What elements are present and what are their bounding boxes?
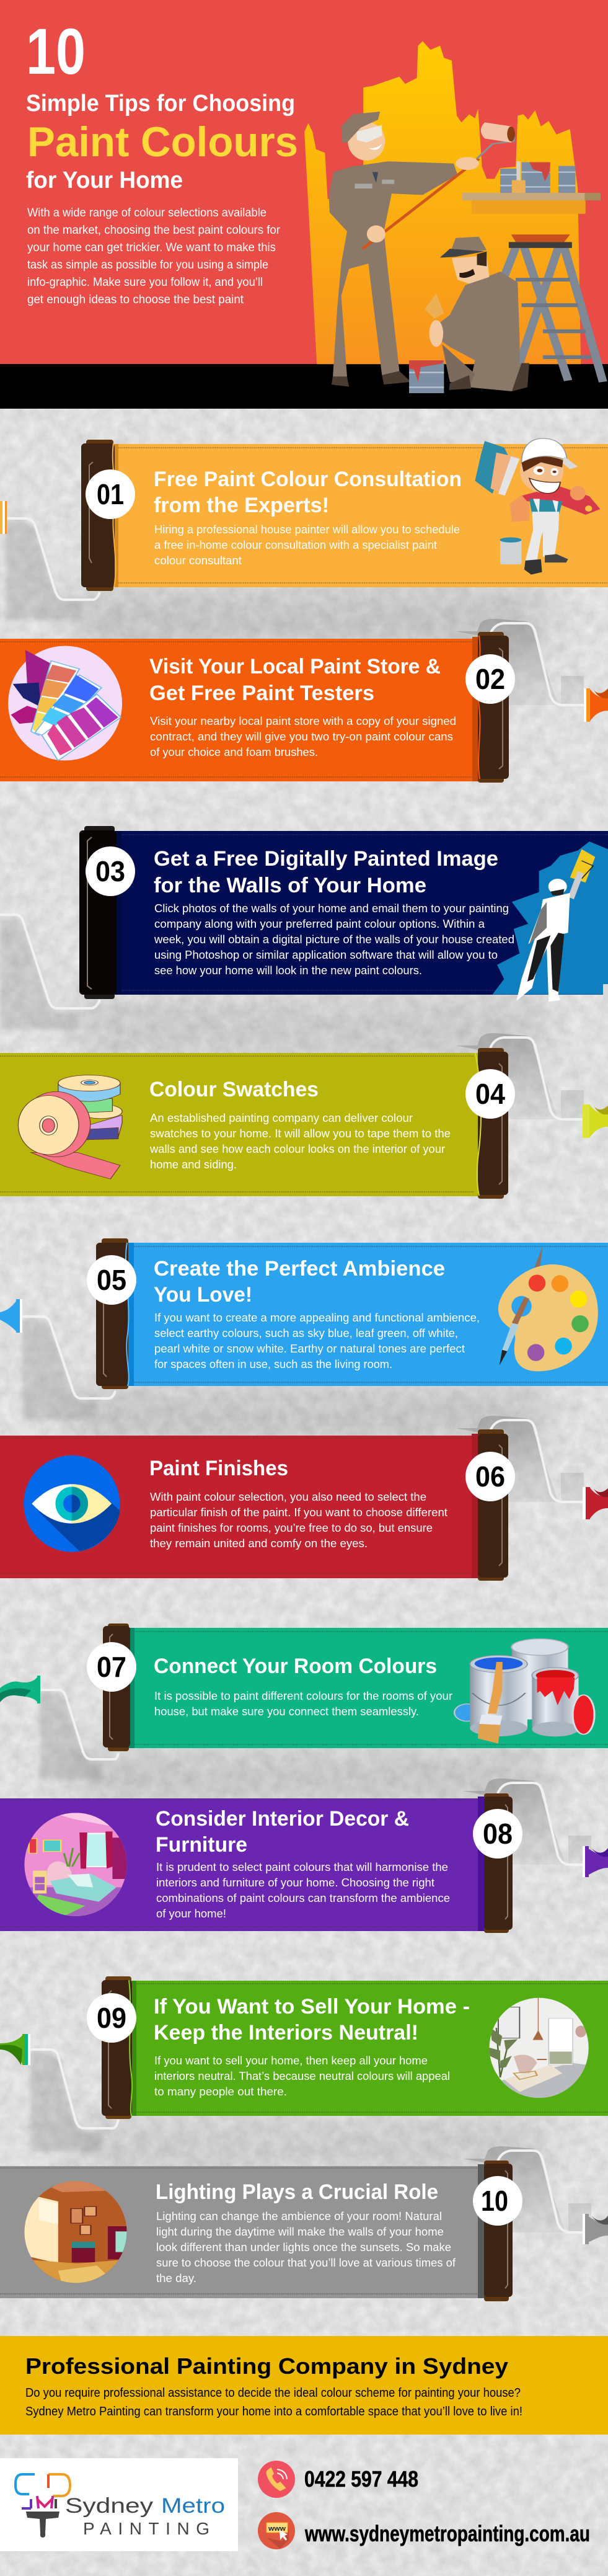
roller wire and handle xyxy=(456,1033,608,1138)
number badge: 06 xyxy=(475,1460,505,1493)
hero title: 10 xyxy=(26,16,86,88)
hero intro text xyxy=(27,207,281,306)
hero illustration: painters and painted wall xyxy=(304,41,603,393)
body text: With paint colour selection, you also need to select the xyxy=(150,1491,426,1503)
heading: You Love! xyxy=(154,1283,252,1307)
hero intro text: task as simple as possible for you using a simple xyxy=(27,259,268,272)
body text: interiors neutral. That’s because neutral colours will appeal xyxy=(154,2070,450,2082)
number badge: 10 xyxy=(481,2185,508,2217)
panel 09: sell your home xyxy=(0,1976,608,2152)
icon: cartoon painter xyxy=(475,438,600,575)
number badge xyxy=(473,2176,522,2226)
heading: Colour Swatches xyxy=(149,1078,319,1101)
logo: Sydney Metro Painting: PAINTING xyxy=(83,2519,209,2538)
number badge xyxy=(473,1809,522,1859)
hero intro text: your home can get trickier. We want to make this xyxy=(27,241,276,254)
panel 01: free consultation xyxy=(0,438,608,620)
heading: If You Want to Sell Your Home - xyxy=(154,1995,470,2019)
heading: Get Free Paint Testers xyxy=(149,682,374,705)
number badge: 04 xyxy=(475,1078,505,1110)
body text: Lighting can change the ambience of your room! Natural xyxy=(156,2210,442,2223)
number badge: 08 xyxy=(483,1818,513,1850)
body text: house, but make sure you connect them seamlessly. xyxy=(154,1705,419,1718)
body text: colour consultant xyxy=(154,554,242,567)
body text xyxy=(154,523,460,567)
roller wire and handle xyxy=(0,2034,118,2152)
body text: It is prudent to select paint colours that will harmonise the xyxy=(156,1861,448,1873)
roller wire xyxy=(0,915,100,1029)
body text: paint finishes for rooms, you’re free to do so, but ensure xyxy=(150,1522,433,1534)
heading xyxy=(154,468,462,517)
icon: rolls of tape xyxy=(18,1075,122,1179)
body text: select earthy colours, such as sky blue, leaf green, off white, xyxy=(154,1327,458,1339)
body text: contract, and they will give you two try-on paint colour cans xyxy=(150,731,453,743)
number badge xyxy=(465,654,515,704)
number badge xyxy=(465,1452,515,1501)
body text: home and siding. xyxy=(150,1158,237,1171)
body text xyxy=(150,1491,447,1550)
icon: warm lit room xyxy=(24,2181,128,2284)
hero title: for Your Home xyxy=(26,167,183,193)
body text: to many people out there. xyxy=(154,2085,287,2098)
hero panel xyxy=(0,0,608,409)
heading: Consider Interior Decor & xyxy=(156,1807,409,1831)
icon: painter rolling blue wall xyxy=(493,842,608,1002)
body text: company along with your preferred paint colour options. Within a xyxy=(154,918,485,930)
body text: An established painting company can deliver colour xyxy=(150,1112,413,1124)
number badge: 09 xyxy=(97,2002,126,2034)
icon: eye xyxy=(24,1455,120,1552)
contact: phone xyxy=(258,2461,418,2498)
number badge: 03 xyxy=(95,855,125,887)
heading: Get a Free Digitally Painted Image xyxy=(154,847,498,871)
body text: Visit your nearby local paint store with a copy of your signed xyxy=(150,715,456,727)
call to action text xyxy=(25,2386,522,2418)
icon: paint cans and brush xyxy=(454,1639,594,1744)
logo: Sydney Metro Painting: Sydney xyxy=(65,2494,153,2518)
body text: If you want to sell your home, then keep all your home xyxy=(154,2054,428,2067)
body text: look different than under lights once the sunsets. So make xyxy=(156,2241,451,2254)
heading: Free Paint Colour Consultation xyxy=(154,468,462,491)
panel 04: colour swatches xyxy=(0,1033,608,1199)
call to action text: Sydney Metro Painting can transform your home into a comfortable space that you’ll love to live in! xyxy=(25,2405,522,2418)
body text xyxy=(154,1690,452,1718)
heading: Furniture xyxy=(156,1833,247,1857)
heading xyxy=(154,1995,470,2045)
heading: Visit Your Local Paint Store & xyxy=(149,655,441,678)
body text: sure to choose the colour that you’ll love at various times of xyxy=(156,2257,456,2269)
body text: they remain united and comfy on the eyes. xyxy=(150,1537,368,1550)
roller wire and handle xyxy=(456,619,608,722)
heading xyxy=(156,1807,409,1857)
roller wire and handle xyxy=(0,1676,118,1780)
body text: If you want to create a more appealing and functional ambience, xyxy=(154,1312,480,1324)
hero title: Simple Tips for Choosing xyxy=(26,91,295,117)
panel 02: local paint store xyxy=(0,619,608,783)
contact: phone: 0422 597 448 xyxy=(304,2466,418,2492)
body text xyxy=(154,2054,450,2098)
body text xyxy=(156,1861,450,1920)
body text xyxy=(154,902,514,977)
contact: website: www xyxy=(268,2525,286,2533)
icon: artist palette xyxy=(498,1246,598,1371)
number badge: 05 xyxy=(97,1264,126,1296)
icon: neutral living room xyxy=(488,1997,589,2098)
heading: Keep the Interiors Neutral! xyxy=(154,2021,418,2045)
body text: interiors and furniture of your home. Choosing the right xyxy=(156,1876,434,1889)
icon: bedroom scene xyxy=(24,1813,128,1916)
hero intro text: on the market, choosing the best paint colours for xyxy=(27,224,281,237)
body text xyxy=(156,2210,456,2285)
body text: Hiring a professional house painter will allow you to schedule xyxy=(154,523,460,536)
hero title xyxy=(26,16,298,193)
logo: Sydney Metro Painting: Metro xyxy=(161,2494,225,2518)
body text xyxy=(150,715,456,758)
roller wire and handle xyxy=(456,1416,608,1519)
hero intro text: get enough ideas to choose the best paint xyxy=(27,293,244,306)
call to action text: Do you require professional assistance to decide the ideal colour scheme for painting your house? xyxy=(25,2386,521,2400)
body text: of your home! xyxy=(156,1908,226,1920)
heading: Paint Finishes xyxy=(149,1457,288,1480)
body text: for spaces often in use, such as the living room. xyxy=(154,1358,392,1370)
roller handle stub xyxy=(603,984,608,1003)
body text: walls and see how each colour looks on the interior of your xyxy=(149,1143,445,1155)
hero intro text: With a wide range of colour selections available xyxy=(27,207,267,220)
number badge xyxy=(86,846,135,896)
call to action band xyxy=(0,2336,608,2435)
logo: Sydney Metro Painting xyxy=(0,2458,238,2551)
contact: website xyxy=(258,2512,590,2549)
body text: of your choice and foam brushes. xyxy=(150,746,318,758)
roller wire and handle xyxy=(0,501,100,620)
call to action heading: Professional Painting Company in Sydney xyxy=(25,2353,508,2379)
body text: week, you will obtain a digital picture of the walls of your house created xyxy=(154,933,514,946)
icon: colour swatch fan xyxy=(8,646,122,760)
heading: for the Walls of Your Home xyxy=(154,874,426,897)
body text xyxy=(154,1312,480,1370)
panel 10: lighting xyxy=(0,2146,608,2301)
heading xyxy=(154,847,498,897)
body text: Click photos of the walls of your home and email them to your painting xyxy=(154,902,509,915)
body text: a free in-home colour consultation with a specialist paint xyxy=(154,539,437,551)
body text: light during the daytime will make the walls of your home xyxy=(156,2226,444,2238)
roller wire and handle xyxy=(463,2146,608,2244)
number badge: 01 xyxy=(97,478,124,510)
heading xyxy=(149,655,441,705)
number badge xyxy=(86,469,135,519)
number badge xyxy=(87,1993,136,2043)
number badge xyxy=(87,1642,136,1692)
heading: from the Experts! xyxy=(154,494,329,517)
body text: It is possible to paint different colours for the rooms of your xyxy=(154,1690,452,1702)
heading: Create the Perfect Ambience xyxy=(154,1257,445,1281)
heading: Connect Your Room Colours xyxy=(154,1654,437,1678)
number badge: 02 xyxy=(475,663,505,695)
body text: using Photoshop or similar application software that will allow you to xyxy=(154,949,498,961)
body text: the day. xyxy=(156,2272,196,2285)
roller wire and handle xyxy=(0,1299,115,1420)
hero title: Paint Colours xyxy=(27,118,298,166)
body text: see how your home will look in the new paint colours. xyxy=(154,964,422,977)
number badge: 07 xyxy=(97,1651,126,1683)
panel 07: connect room colours xyxy=(0,1623,608,1780)
panel 06: paint finishes xyxy=(0,1416,608,1581)
number badge xyxy=(465,1069,515,1119)
heading xyxy=(154,1257,445,1307)
panel 05: perfect ambience xyxy=(0,1238,608,1420)
body text xyxy=(149,1112,451,1171)
body text: pearl white or snow white. Earthy or natural tones are perfect xyxy=(154,1343,465,1355)
body text: combinations of paint colours can transform the ambience xyxy=(156,1892,450,1904)
body text: swatches to your home. It will allow you to tape them to the xyxy=(150,1127,451,1140)
roller wire and handle xyxy=(463,1779,608,1877)
heading: Lighting Plays a Crucial Role xyxy=(156,2180,438,2204)
hero intro text: info-graphic. Make sure you follow it, and you’ll xyxy=(27,276,263,289)
panel 03: digitally painted image xyxy=(0,826,608,1029)
panel 08: interior decor and furniture xyxy=(0,1779,608,1933)
number badge xyxy=(87,1255,136,1305)
body text: particular finish of the paint. If you want to choose different xyxy=(150,1506,447,1519)
